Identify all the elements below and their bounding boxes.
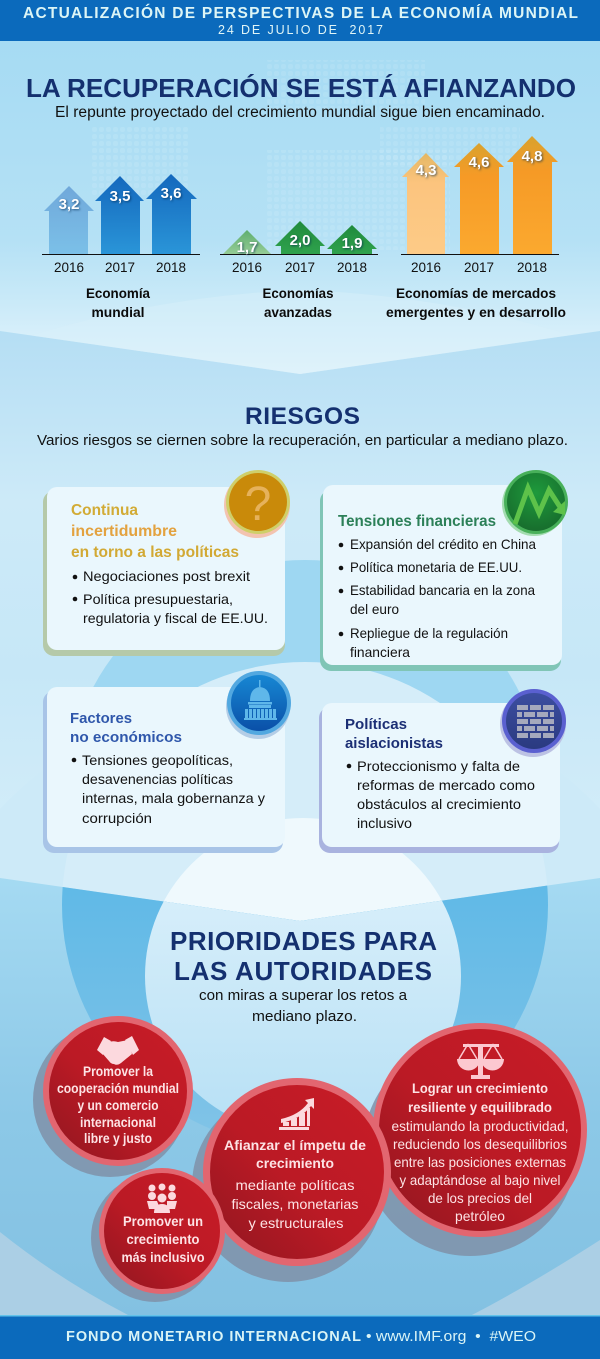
chart: economía mundial: 3,5 xyxy=(110,188,130,205)
circle: ímpetu de crecimiento: mediante políticas xyxy=(236,1177,354,1193)
chart: economías avanzadas: 2,0 xyxy=(290,232,310,249)
circle: crecimiento resiliente: y adaptándose al bajo nivel xyxy=(400,1172,560,1188)
panel: factores no económicos: internas, mala gobernanza y xyxy=(82,790,265,806)
circle: ímpetu de crecimiento: y estructurales xyxy=(248,1215,344,1231)
circle: crecimiento resiliente: Lograr un crecimiento xyxy=(412,1081,548,1096)
chart: economías avanzadas: 1,7 xyxy=(237,239,257,256)
panel: tensiones financieras: Política monetaria de EE.UU. xyxy=(350,559,522,575)
panel: tensiones financieras: Tensiones financieras xyxy=(338,513,496,530)
chart: economías emergentes: 2017 xyxy=(464,260,494,275)
prioridades intro xyxy=(199,988,408,1025)
circle: crecimiento resiliente: estimulando la productividad, xyxy=(392,1118,568,1134)
panel: factores no económicos: Tensiones geopolíticas, xyxy=(82,752,233,768)
chart: economías avanzadas: 1,9 xyxy=(342,235,362,252)
chart: economía mundial: 2017 xyxy=(105,260,135,275)
header date: 24 DE JULIO DE 2017 xyxy=(218,23,383,37)
icon: growth chart xyxy=(279,1098,314,1130)
circle: crecimiento resiliente xyxy=(363,1023,587,1256)
chart: economías avanzadas xyxy=(220,221,378,320)
circle: crecimiento resiliente: de los precios del xyxy=(428,1190,532,1206)
panel: factores no económicos xyxy=(43,671,291,853)
circle: crecimiento inclusivo: crecimiento xyxy=(126,1232,200,1247)
circle: ímpetu de crecimiento: Afianzar el ímpetu de xyxy=(224,1138,367,1153)
circle: cooperación mundial: Promover la xyxy=(83,1064,153,1079)
circle: crecimiento resiliente: entre las posiciones externas xyxy=(394,1154,566,1170)
panel: políticas aislacionistas: Proteccionismo y falta de xyxy=(357,758,520,774)
main heading: LA RECUPERACIÓN SE ESTÁ AFIANZANDO xyxy=(26,73,576,103)
circle: ímpetu de crecimiento xyxy=(192,1078,391,1282)
chart: economías avanzadas: 2016 xyxy=(232,260,262,275)
chart: economías emergentes: 4,8 xyxy=(522,148,542,165)
icon: people xyxy=(147,1184,177,1213)
chart: economías emergentes: Economías de mercados xyxy=(396,285,556,301)
circle: ímpetu de crecimiento: crecimiento xyxy=(256,1156,334,1171)
icon: brick wall xyxy=(500,689,566,757)
panel: políticas aislacionistas xyxy=(319,689,566,853)
panel: tensiones financieras xyxy=(320,470,568,671)
icon: question mark xyxy=(224,470,290,538)
circle: cooperación mundial: cooperación mundial xyxy=(57,1081,179,1096)
panel: incertidumbre xyxy=(43,470,290,656)
chart: economías emergentes: 2018 xyxy=(517,260,547,275)
chart: economías emergentes: 2016 xyxy=(411,260,441,275)
chart: economía mundial: Economía xyxy=(86,285,150,301)
panel: incertidumbre: Continua xyxy=(71,502,138,519)
header title: ACTUALIZACIÓN DE PERSPECTIVAS DE LA ECONOMÍA MUNDIAL xyxy=(23,4,578,22)
panel: políticas aislacionistas: Políticas xyxy=(345,716,407,733)
chart: economía mundial: 2018 xyxy=(156,260,186,275)
chart: economías emergentes xyxy=(386,136,566,320)
subheading: El repunte proyectado del crecimiento mundial sigue bien encaminado. xyxy=(55,104,545,121)
circle: cooperación mundial: libre y justo xyxy=(84,1131,152,1146)
circle: crecimiento inclusivo: más inclusivo xyxy=(122,1250,204,1265)
chart: economías emergentes: 4,6 xyxy=(469,154,489,171)
prioridades intro: mediano plazo. xyxy=(252,1009,357,1025)
chart: economías avanzadas: avanzadas xyxy=(264,304,332,320)
panel: tensiones financieras: Estabilidad bancaria en la zona xyxy=(350,582,535,598)
chart: economía mundial: 3,6 xyxy=(161,185,181,202)
circle: cooperación mundial: internacional xyxy=(80,1115,156,1130)
panel: incertidumbre: en torno a las políticas xyxy=(71,544,239,561)
prioridades heading xyxy=(170,926,437,986)
panel: incertidumbre: Negociaciones post brexit xyxy=(83,568,250,584)
panel: factores no económicos: Factores xyxy=(70,710,132,727)
chart: economías avanzadas: 2017 xyxy=(285,260,315,275)
panel: tensiones financieras: Repliegue de la regulación xyxy=(350,625,508,641)
circle: cooperación mundial xyxy=(33,1016,193,1177)
circle: crecimiento inclusivo xyxy=(91,1168,225,1302)
icon: capitol xyxy=(226,671,291,739)
panel: políticas aislacionistas: obstáculos al crecimiento xyxy=(357,796,521,812)
circle: crecimiento resiliente: petróleo xyxy=(455,1208,505,1224)
circle: ímpetu de crecimiento: fiscales, monetarias xyxy=(232,1196,358,1212)
chart: economías emergentes: emergentes y en desarrollo xyxy=(386,304,566,320)
panel: tensiones financieras: Expansión del crédito en China xyxy=(350,536,536,552)
icon: question mark: ? xyxy=(245,478,271,531)
panel: factores no económicos: corrupción xyxy=(82,810,152,826)
icon: scales xyxy=(457,1044,504,1079)
circle: crecimiento resiliente: resiliente y equilibrado xyxy=(408,1100,552,1115)
footer banner: FONDO MONETARIO INTERNACIONAL xyxy=(66,1329,361,1345)
panel: factores no económicos: desavenencias políticas xyxy=(82,771,233,787)
panel: tensiones financieras: financiera xyxy=(350,644,410,660)
panel: incertidumbre: Política presupuestaria, xyxy=(83,591,233,607)
chart: economía mundial: 2016 xyxy=(54,260,84,275)
prioridades heading: LAS AUTORIDADES xyxy=(174,956,432,986)
chart: economías avanzadas: Economías xyxy=(262,285,334,301)
chart: economías avanzadas: 2018 xyxy=(337,260,367,275)
chart: economía mundial: 3,2 xyxy=(59,196,79,213)
footer banner: • www.IMF.org • #WEO xyxy=(366,1329,536,1345)
prioridades heading: PRIORIDADES PARA xyxy=(170,926,437,956)
panel: factores no económicos: no económicos xyxy=(70,729,182,746)
icon: zigzag arrow xyxy=(502,470,568,536)
circle: crecimiento resiliente: reduciendo los desequilibrios xyxy=(393,1136,567,1152)
footer banner xyxy=(0,1315,600,1359)
riesgos heading: RIESGOS xyxy=(245,403,360,430)
panel: incertidumbre: regulatoria y fiscal de EE.UU. xyxy=(83,610,268,626)
riesgos intro: Varios riesgos se ciernen sobre la recuperación, en particular a mediano plazo. xyxy=(37,432,568,449)
chart: economía mundial: mundial xyxy=(92,304,144,320)
prioridades intro: con miras a superar los retos a xyxy=(199,988,408,1004)
panel: políticas aislacionistas: reformas de mercado como xyxy=(357,777,535,793)
panel: políticas aislacionistas: inclusivo xyxy=(357,815,412,831)
circle: cooperación mundial: y un comercio xyxy=(78,1098,158,1113)
panel: políticas aislacionistas: aislacionistas xyxy=(345,735,443,752)
circle: crecimiento inclusivo: Promover un xyxy=(123,1214,203,1229)
panel: tensiones financieras: del euro xyxy=(350,601,399,617)
icon: handshake xyxy=(97,1036,139,1065)
chart: economías emergentes: 4,3 xyxy=(416,162,436,179)
header banner xyxy=(0,0,600,41)
panel: incertidumbre: incertidumbre xyxy=(71,523,177,540)
chart: economía mundial xyxy=(42,174,200,320)
